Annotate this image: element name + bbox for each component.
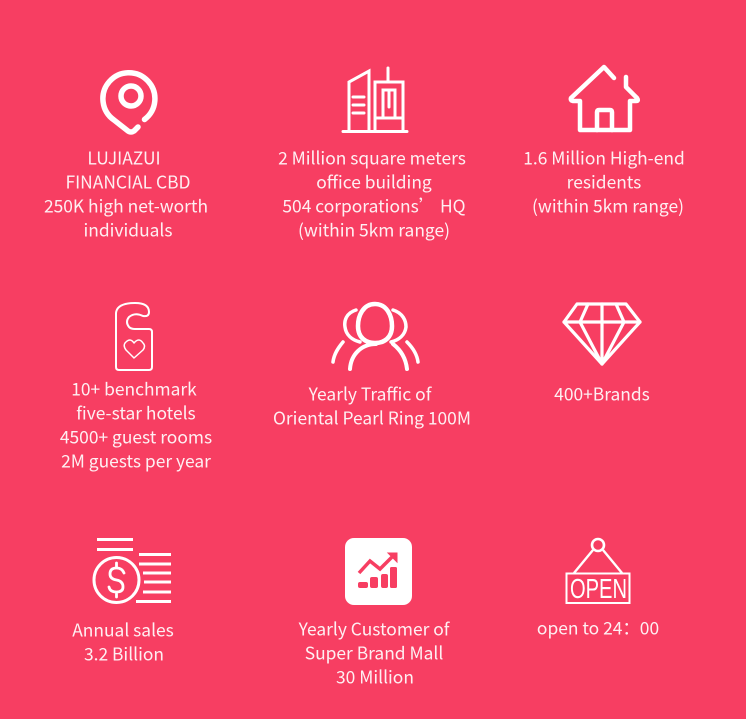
text: opening hours: open to 24：00: [537, 615, 659, 640]
icon: diamond: [564, 304, 640, 364]
text: residents: 1.6 Million High-end: [523, 145, 685, 170]
text: sales: 3.2 Billion: [84, 641, 164, 666]
icon: growth chart badge: [345, 538, 412, 605]
text: Lujiazui CBD: 250K high net-worth: [44, 193, 208, 218]
text: hotels: five-star hotels: [76, 400, 196, 425]
icon: door hanger with heart: [116, 303, 152, 370]
text: office buildings: office building: [316, 169, 432, 194]
panel: brands: [554, 304, 650, 406]
text: brands: 400+Brands: [554, 381, 650, 406]
icon: group of people: [333, 304, 418, 369]
text: hotels: 2M guests per year: [61, 448, 211, 473]
text: traffic: Oriental Pearl Ring 100M: [273, 405, 471, 430]
text: customers: Super Brand Mall: [305, 640, 443, 665]
text: Lujiazui CBD: individuals: [83, 217, 173, 242]
text: residents: [523, 145, 685, 218]
text: office buildings: 2 Million square meters: [278, 145, 466, 170]
icon: open sign: OPEN: [570, 573, 627, 604]
text: customers: 30 Million: [336, 664, 414, 689]
text: customers: Yearly Customer of: [298, 616, 451, 641]
text: traffic: [273, 381, 471, 430]
text: residents: (within 5km range): [532, 193, 684, 218]
panel: opening hours: [537, 539, 659, 640]
text: sales: Annual sales: [72, 617, 174, 642]
icon: house: [571, 67, 638, 130]
text: traffic: Yearly Traffic of: [308, 381, 433, 406]
text: Lujiazui CBD: FINANCIAL CBD: [65, 169, 191, 194]
text: office buildings: (within 5km range): [298, 217, 450, 242]
text: hotels: [60, 376, 212, 473]
text: sales: [72, 617, 174, 666]
panel: residents: [523, 67, 685, 218]
text: Lujiazui CBD: LUJIAZUI: [87, 145, 161, 170]
text: office buildings: 504 corporations’ HQ: [282, 193, 466, 218]
panel: hotels: [60, 303, 212, 473]
icon: office towers: [343, 68, 407, 132]
panel: traffic: [273, 304, 471, 430]
panel: office buildings: [278, 68, 466, 242]
text: Lujiazui CBD: [44, 145, 208, 242]
icon: dollar coin and stacks: [94, 540, 171, 602]
text: hotels: 4500+ guest rooms: [60, 424, 212, 449]
text: hotels: 10+ benchmark: [71, 376, 197, 401]
text: office buildings: [278, 145, 466, 242]
panel: Lujiazui CBD: [44, 73, 208, 242]
panel: sales: [72, 540, 174, 666]
panel: customers: [298, 538, 451, 689]
icon: location pin: [103, 73, 155, 132]
text: residents: residents: [567, 169, 641, 194]
text: customers: [298, 616, 451, 689]
